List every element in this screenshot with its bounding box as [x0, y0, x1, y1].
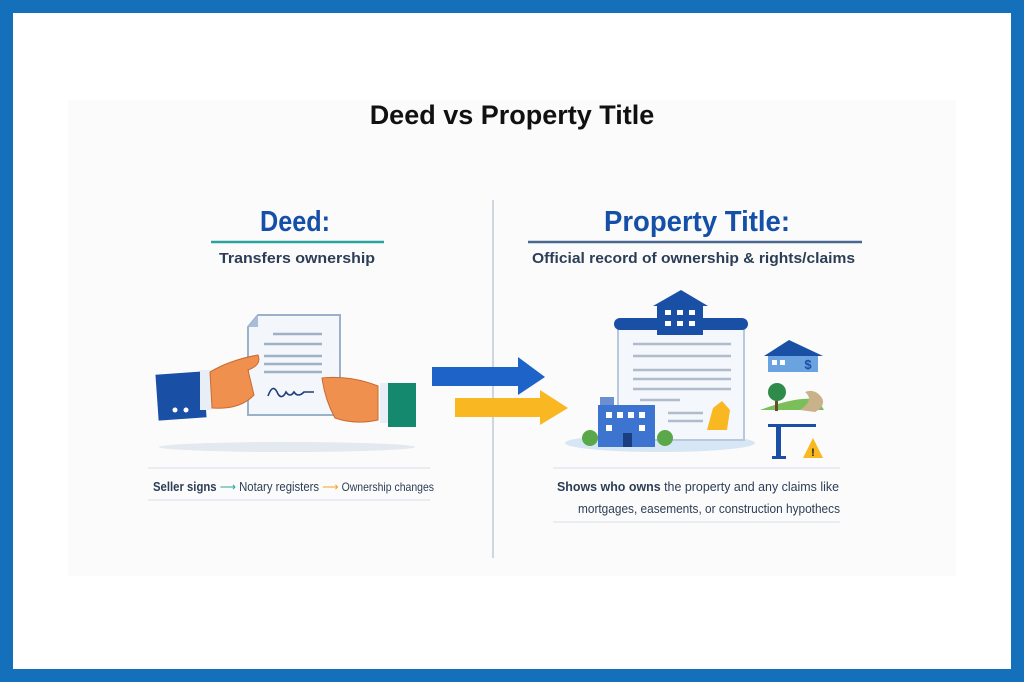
arrows	[432, 357, 568, 425]
subtitle: deed: Transfers ownership	[219, 250, 375, 267]
panel: property title	[528, 206, 862, 522]
title: Deed vs Property Title	[370, 100, 654, 130]
arrow: yellow	[455, 390, 568, 425]
panel: property title: Shows who owns the property and any claims like	[557, 479, 839, 494]
icon: house with dollar	[764, 340, 823, 372]
illustration: hands with deed	[155, 315, 416, 452]
card background	[68, 100, 956, 576]
building	[600, 397, 614, 405]
heading: deed: Deed:	[260, 206, 330, 238]
caption: property title	[553, 467, 840, 469]
arrow: blue	[432, 357, 545, 395]
panel: deed	[148, 206, 434, 500]
icon: house with dollar: $	[804, 357, 812, 372]
icon: crane with warning	[768, 424, 823, 459]
illustration: title document with building	[565, 290, 755, 452]
heading: property title: Property Title:	[604, 206, 790, 238]
document	[248, 315, 340, 415]
steps line	[148, 467, 430, 469]
icon: tree and road	[760, 383, 824, 412]
divider	[492, 200, 494, 558]
right hand	[322, 377, 378, 422]
panel: property title: mortgages, easements, or construction hypothecs	[578, 502, 840, 516]
icon: crane with warning: !	[811, 447, 815, 459]
panel: deed: Seller signs ⟶ Notary registers ⟶ Ownership changes	[153, 479, 434, 494]
left hand	[155, 371, 207, 421]
subtitle: property title: Official record of ownership & rights/claims	[532, 250, 855, 267]
